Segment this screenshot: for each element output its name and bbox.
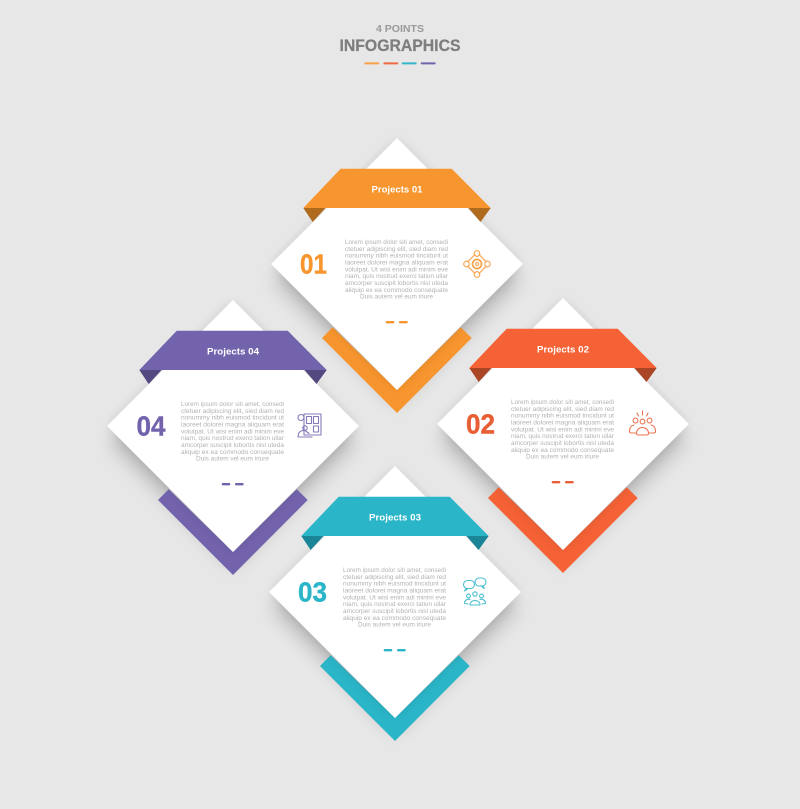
body text: nonummy nibh euismod tincidunt ut bbox=[181, 415, 284, 422]
body text: amcorper suscipit lobortis nisl uteda bbox=[181, 442, 284, 449]
body text: niam, quis nostrud exerci tation ullar bbox=[181, 435, 285, 442]
right ribbon fold bbox=[304, 370, 327, 384]
body text: amcorper suscipit lobortis nisl uteda bbox=[345, 280, 448, 287]
left ribbon fold bbox=[139, 370, 162, 384]
white diamond card bbox=[271, 138, 523, 390]
chevron shade bbox=[441, 302, 685, 546]
chevron shade bbox=[273, 470, 517, 714]
title colour dashes bbox=[364, 62, 436, 64]
body text: volutpat. Ut wisi enim adi minim eve bbox=[181, 428, 284, 435]
title block bbox=[340, 23, 460, 64]
body text: Lorem ipsum dolor siti amet, consedi bbox=[181, 401, 284, 408]
body text: volutpat. Ut wisi enim adi minim eve bbox=[345, 266, 448, 273]
body text: amcorper suscipit lobortis nisl uteda bbox=[511, 440, 614, 447]
right ribbon fold bbox=[468, 208, 491, 222]
body text: niam, quis nostrud exerci tation ullar bbox=[511, 433, 615, 440]
icon: connected gear bbox=[464, 251, 490, 277]
body text: aliquip ex ea commodo consequate bbox=[345, 287, 448, 294]
ribbon header bbox=[469, 329, 657, 368]
left ribbon fold bbox=[303, 208, 326, 222]
body text: laoreet dolorei magna aliquam erat bbox=[181, 422, 284, 428]
body text: aliquip ex ea commodo consequate bbox=[343, 615, 446, 622]
body text: ctetuer adipiscing elit, sied diam red bbox=[181, 408, 284, 415]
white diamond card bbox=[269, 466, 521, 718]
white diamond card bbox=[437, 298, 689, 550]
icon: team of people bbox=[630, 411, 656, 435]
body text bbox=[343, 567, 447, 629]
right ribbon fold bbox=[466, 536, 489, 550]
body text: aliquip ex ea commodo consequate bbox=[181, 449, 284, 456]
body text: Lorem ipsum dolor siti amet, consedi bbox=[345, 239, 448, 246]
body text: nonummy nibh euismod tincidunt ut bbox=[345, 253, 448, 260]
body text: Duis autem vel eum iriure bbox=[526, 454, 599, 461]
body text bbox=[181, 401, 285, 463]
body text: Lorem ipsum dolor siti amet, consedi bbox=[511, 399, 614, 406]
bottom chevron bbox=[322, 327, 472, 413]
body text: ctetuer adipiscing elit, sied diam red bbox=[345, 246, 448, 253]
body text: niam, quis nostrud exerci tation ullar bbox=[345, 273, 449, 280]
big number: 02 bbox=[466, 408, 495, 440]
body text: nonummy nibh euismod tincidunt ut bbox=[511, 413, 614, 420]
accent dashes bbox=[222, 483, 244, 485]
bottom chevron bbox=[488, 487, 638, 573]
chevron shade bbox=[275, 142, 519, 386]
body text: laoreet dolorei magna aliquam erat bbox=[345, 260, 448, 266]
accent dashes bbox=[384, 649, 406, 651]
title: infographics: INFOGRAPHICS bbox=[340, 37, 460, 55]
body text: ctetuer adipiscing elit, sied diam red bbox=[343, 574, 446, 581]
ribbon header bbox=[303, 169, 491, 208]
icon: document and person bbox=[298, 414, 321, 437]
ribbon label: Projects 04 bbox=[207, 347, 260, 358]
chevron shade bbox=[111, 304, 355, 548]
ribbon label: Projects 03 bbox=[369, 513, 421, 524]
panel: projects 03 bbox=[269, 466, 521, 741]
body text bbox=[345, 239, 449, 301]
bottom chevron bbox=[158, 489, 308, 575]
panel: projects 01 bbox=[271, 138, 523, 413]
body text: Duis autem vel eum iriure bbox=[360, 294, 433, 301]
right ribbon fold bbox=[634, 368, 657, 382]
accent dashes bbox=[386, 321, 408, 323]
background shadow bbox=[440, 318, 686, 564]
body text: Duis autem vel eum iriure bbox=[196, 456, 269, 463]
body text: niam, quis nostrud exerci tation ullar bbox=[343, 601, 447, 608]
big number: 04 bbox=[136, 410, 166, 442]
ribbon label: Projects 01 bbox=[372, 185, 423, 196]
ribbon header bbox=[301, 497, 489, 536]
panel: projects 02 bbox=[437, 298, 689, 573]
icon: chat and people bbox=[464, 578, 486, 605]
ribbon header bbox=[139, 331, 327, 370]
bottom chevron bbox=[320, 655, 470, 741]
body text: nonummy nibh euismod tincidunt ut bbox=[343, 581, 446, 588]
body text: laoreet dolorei magna aliquam erat bbox=[343, 588, 446, 594]
left ribbon fold bbox=[301, 536, 324, 550]
body text: volutpat. Ut wisi enim adi minim eve bbox=[511, 426, 614, 433]
background shadow bbox=[110, 320, 356, 566]
body text bbox=[511, 399, 615, 461]
background shadow bbox=[274, 158, 520, 404]
accent dashes bbox=[552, 481, 574, 483]
body text: volutpat. Ut wisi enim adi minim eve bbox=[343, 594, 446, 601]
panel: projects 04 bbox=[107, 300, 359, 575]
big number: 03 bbox=[298, 576, 327, 608]
body text: Duis autem vel eum iriure bbox=[358, 622, 431, 629]
background shadow bbox=[272, 486, 518, 732]
white diamond card bbox=[107, 300, 359, 552]
subtitle: 4 points: 4 POINTS bbox=[376, 23, 424, 35]
body text: aliquip ex ea commodo consequate bbox=[511, 447, 614, 454]
left ribbon fold bbox=[469, 368, 492, 382]
body text: amcorper suscipit lobortis nisl uteda bbox=[343, 608, 446, 615]
body text: Lorem ipsum dolor siti amet, consedi bbox=[343, 567, 446, 574]
body text: ctetuer adipiscing elit, sied diam red bbox=[511, 406, 614, 413]
body text: laoreet dolorei magna aliquam erat bbox=[511, 420, 614, 426]
ribbon label: Projects 02 bbox=[537, 345, 589, 356]
big number: 01 bbox=[300, 248, 327, 280]
